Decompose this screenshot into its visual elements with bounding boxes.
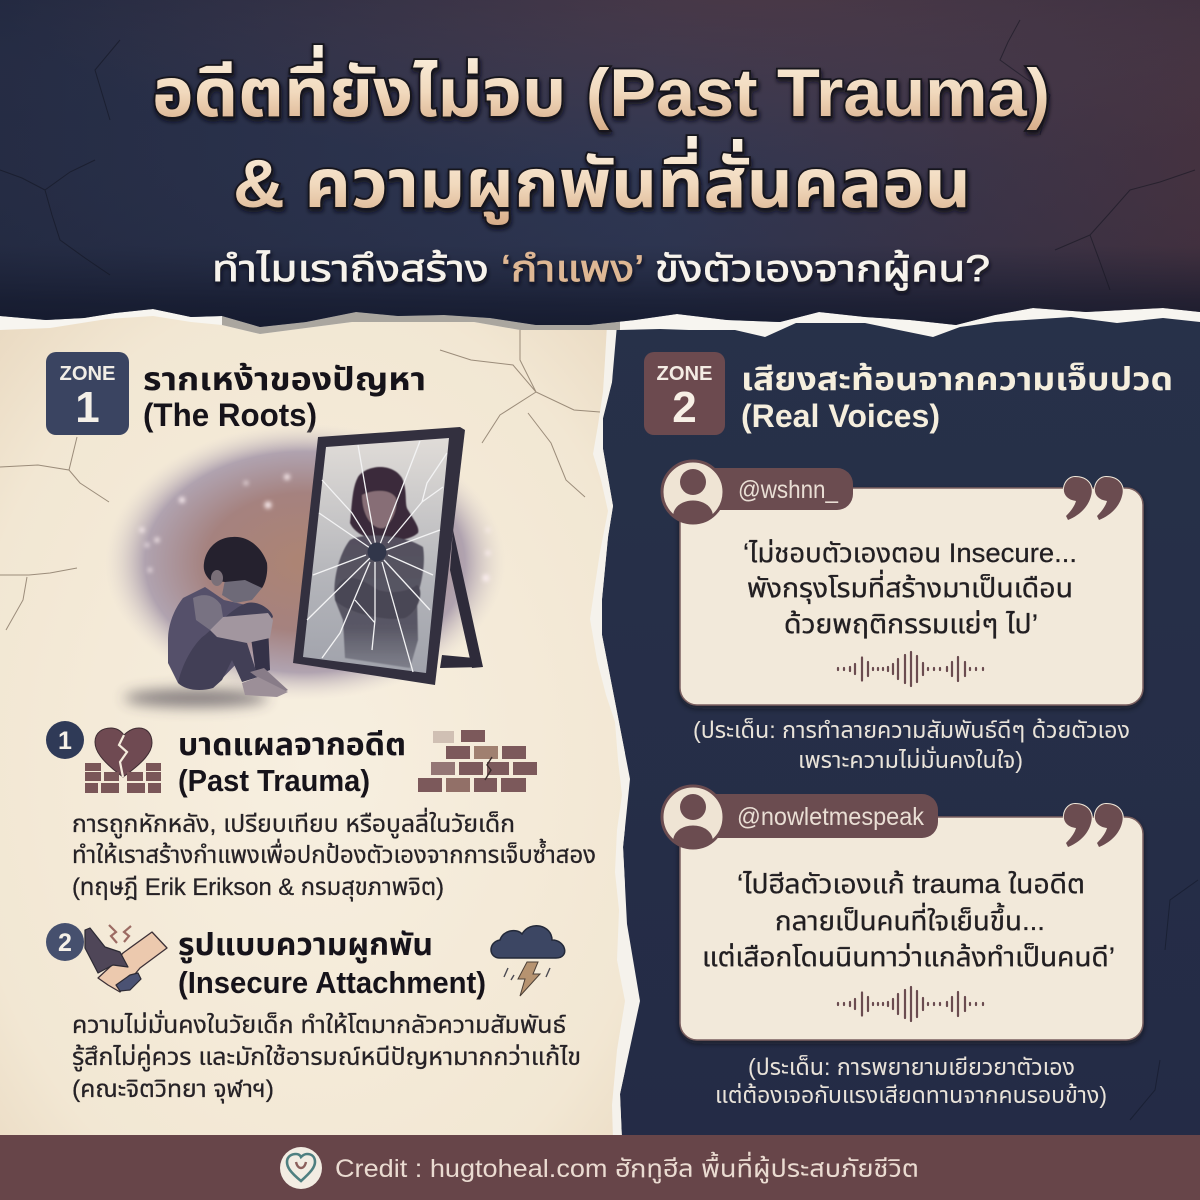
section 2: insecure attachment: [46, 923, 581, 1104]
waveform: [838, 652, 983, 686]
zone 1 badge: ZONE: [60, 363, 116, 385]
quote text: กลายเป็นคนที่ใจเย็นขึ้น...: [775, 902, 1045, 936]
body text: [72, 807, 596, 902]
section 1: past trauma: [46, 721, 596, 902]
voice card 1: [662, 461, 1143, 705]
body text: ความไม่มั่นคงในวัยเด็ก ทำให้โตมากลัวความสัมพันธ์: [72, 1009, 566, 1039]
floor shadow: [124, 689, 268, 707]
illustration: child and broken mirror: [105, 424, 505, 707]
body text: รู้สึกไม่คู่ควร และมักใช้อารมณ์หนีปัญหามากกว่าแก้ไข: [72, 1043, 581, 1072]
zone 2 heading: (Real Voices): [741, 398, 940, 434]
avatar: [662, 786, 724, 848]
zone 2 heading: [741, 361, 1173, 434]
zone 1 badge: 1: [75, 383, 100, 432]
caption 1: เพราะความไม่มั่นคงในใจ): [798, 745, 1023, 773]
zone 1 heading: (The Roots): [143, 397, 317, 433]
mirror glass: [303, 438, 449, 673]
waveform: [838, 987, 983, 1021]
quotation mark: [1064, 804, 1123, 847]
body text: (ทฤษฎี Erik Erikson & กรมสุขภาพจิต): [72, 874, 444, 902]
voice card 1: @wshnn_: [738, 476, 839, 504]
heading: (Insecure Attachment): [178, 965, 486, 1000]
card body: [680, 817, 1143, 1040]
quote text: [743, 538, 1077, 639]
voice card 2: [662, 786, 1143, 1040]
zone 2 badge: ZONE: [656, 363, 712, 385]
heading: บาดแผลจากอดีต: [178, 727, 406, 762]
title: & ความผูกพันที่สั่นคลอน: [233, 136, 971, 225]
number badge 1: [46, 721, 84, 759]
zone 1 heading: รากเหง้าของปัญหา: [143, 361, 426, 397]
panel: zone 2 dark background: [602, 310, 1200, 1140]
number badge 1: 1: [58, 727, 72, 755]
zone 1 heading: [143, 361, 426, 433]
quote text: ‘ไปฮีลตัวเองแก้ trauma ในอดีต: [737, 869, 1085, 899]
heading: [178, 727, 406, 798]
heading: [178, 927, 486, 1000]
footer credit bar: [0, 1135, 1200, 1200]
icon: broken heart with walls: [85, 728, 161, 793]
crouching child: [168, 537, 288, 697]
caption 1: (ประเด็น: การทำลายความสัมพันธ์ดีๆ ด้วยตัวเอง: [693, 717, 1130, 743]
zone 2 badge: [644, 352, 725, 435]
background glow: [105, 424, 505, 700]
reflected woman: [334, 467, 424, 668]
sparkles: [140, 474, 490, 582]
body text: ทำให้เราสร้างกำแพงเพื่อปกป้องตัวเองจากการเจ็บซ้ำสอง: [72, 838, 596, 869]
icon: hug to heal logo: [280, 1147, 322, 1189]
mirror frame: [293, 427, 465, 685]
title: [152, 45, 1050, 225]
zone 2 badge: 2: [672, 383, 697, 432]
voice card 2: @nowletmespeak: [737, 803, 924, 831]
body text: [72, 1009, 581, 1104]
glass cracks: [307, 441, 447, 672]
caption 2: (ประเด็น: การพยายามเยียวยาตัวเอง: [748, 1054, 1075, 1080]
panel: zone 1 paper background: [0, 300, 625, 1140]
zone 2 heading: เสียงสะท้อนจากความเจ็บปวด: [741, 361, 1173, 397]
quote text: ‘ไม่ชอบตัวเองตอน Insecure...: [743, 538, 1077, 568]
icon: storm cloud: [491, 926, 565, 996]
quote text: ด้วยพฤติกรรมแย่ๆ ไป’: [784, 609, 1038, 639]
subtitle: ทำไมเราถึงสร้าง ‘กำแพง’ ขังตัวเองจากผู้คน?: [212, 248, 990, 291]
caption 1: [693, 717, 1130, 773]
card body: [680, 488, 1143, 705]
icon: cracked brick wall: [418, 730, 537, 792]
username pill: [690, 794, 938, 838]
torn white edge between panels: [590, 325, 640, 1140]
caption 2: แต่ต้องเจอกับแรงเสียดทานจากคนรอบข้าง): [715, 1082, 1107, 1108]
quotation mark: [1064, 477, 1123, 520]
body text: (คณะจิตวิทยา จุฬาฯ): [72, 1076, 274, 1104]
heading: รูปแบบความผูกพัน: [178, 927, 433, 963]
icon: strained handshake: [85, 925, 167, 992]
torn white edge under header: [0, 300, 1200, 337]
heading: (Past Trauma): [178, 763, 370, 798]
avatar: [662, 461, 724, 523]
zone 1 badge: [46, 352, 129, 435]
quote text: แต่เสือกโดนนินทาว่าแกล้งทำเป็นคนดี’: [702, 942, 1115, 972]
caption 2: [715, 1054, 1107, 1108]
mirror stand: [450, 530, 483, 668]
username pill: [690, 468, 853, 510]
quote text: พังกรุงโรมที่สร้างมาเป็นเดือน: [747, 569, 1073, 604]
quote text: [702, 869, 1115, 972]
panel: header background: [0, 0, 1200, 327]
number badge 2: [46, 923, 84, 961]
body text: การถูกหักหลัง, เปรียบเทียบ หรือบูลลี่ในวัยเด็ก: [72, 807, 515, 839]
title: อดีตที่ยังไม่จบ (Past Trauma): [152, 45, 1050, 131]
credit text: Credit : hugtoheal.com ฮักทูฮีล พื้นที่ผู้ประสบภัยชีวิต: [335, 1151, 919, 1184]
number badge 2: 2: [58, 929, 72, 957]
